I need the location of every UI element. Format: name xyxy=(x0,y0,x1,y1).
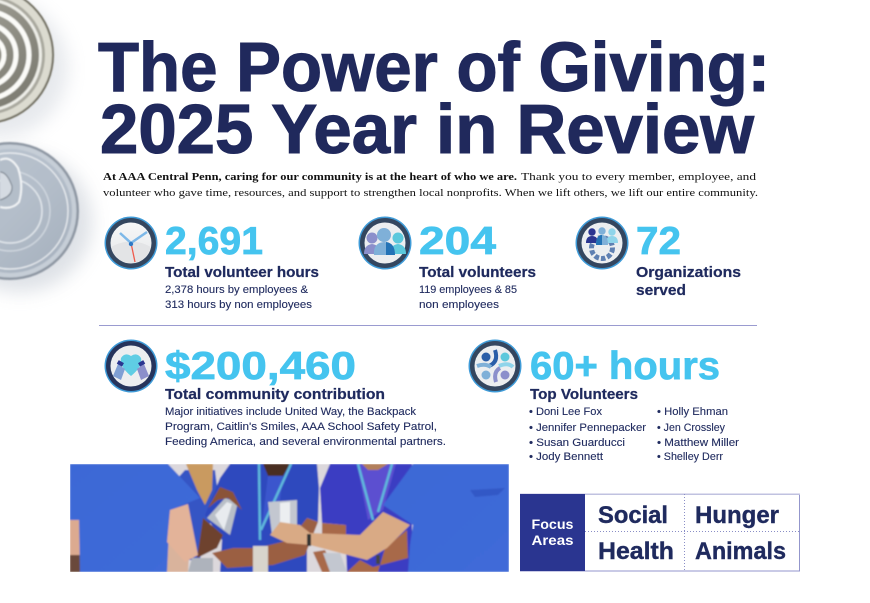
icon: volunteers group xyxy=(358,216,412,270)
stat: total community contribution: Major initiatives include United Way, the Backpack xyxy=(165,406,417,418)
stat: organizations served xyxy=(636,220,741,299)
stat: total community contribution: Total community contribution xyxy=(165,386,385,403)
person behind: shirt and hair xyxy=(167,470,220,560)
intro text: Thank you to every member, employee, and xyxy=(521,171,757,183)
held can right xyxy=(268,500,297,535)
right-centre person shirt xyxy=(320,464,412,572)
skin at far left edge xyxy=(70,519,80,556)
focus areas table: Hunger xyxy=(695,502,779,529)
stat: total community contribution: $200,460 xyxy=(165,345,356,388)
bottom can xyxy=(188,558,213,572)
stat: total volunteers: 119 employees & 85 xyxy=(419,284,517,296)
stat: total volunteer hours: 2,378 hours by employees & xyxy=(165,284,309,296)
title xyxy=(98,28,770,168)
focus areas table: Social xyxy=(598,502,668,529)
focus areas table: Health xyxy=(598,538,674,565)
photo: volunteers in blue shirts holding cans xyxy=(70,464,509,572)
stat: total volunteers: 204 xyxy=(419,220,496,263)
intro text xyxy=(103,171,758,199)
lower right hand and can xyxy=(312,549,330,572)
stat: total volunteer hours: Total volunteer hours xyxy=(165,264,319,281)
stat: total community contribution: Program, Caitlin's Smiles, AAA School Safety Patrol, xyxy=(165,421,437,433)
stat: 60+ hours top volunteers: Top Volunteers xyxy=(530,386,638,403)
list: volunteer names column one: • Doni Lee Fox xyxy=(529,406,602,418)
stat: 60+ hours top volunteers xyxy=(529,345,739,463)
list: volunteer names column two: • Jen Crossley xyxy=(657,422,725,434)
photo: two tin can lids xyxy=(0,0,92,292)
stat: 60+ hours top volunteers: 60+ hours xyxy=(530,345,720,388)
stat: total community contribution xyxy=(165,345,446,448)
list: volunteer names column two: • Matthew Miller xyxy=(657,437,739,449)
list: volunteer names column two: • Holly Ehman xyxy=(657,406,728,418)
front right person shirt xyxy=(383,464,509,572)
stat: total volunteer hours xyxy=(165,220,319,311)
stat: organizations served: served xyxy=(636,282,686,299)
stat: total volunteers xyxy=(419,220,536,311)
stat: organizations served: Organizations xyxy=(636,264,741,281)
list: volunteer names column one xyxy=(529,406,646,463)
stat: organizations served: 72 xyxy=(636,220,681,263)
icon: organizations xyxy=(576,216,628,270)
lanyard right-centre xyxy=(358,464,392,520)
list: volunteer names column one: • Jennifer Pennepacker xyxy=(529,422,646,434)
stat: total volunteer hours: 313 hours by non employees xyxy=(165,299,313,311)
reaching arm xyxy=(270,512,410,560)
front left person shirt xyxy=(70,464,200,572)
centre person right forearm xyxy=(212,518,318,568)
stat: total volunteers: Total volunteers xyxy=(419,264,536,281)
title: 2025 Year in Review xyxy=(100,90,755,168)
icon: top volunteers circle xyxy=(468,340,522,392)
centre person left forearm xyxy=(197,518,223,558)
divider xyxy=(99,325,757,326)
list: volunteer names column one: • Jody Bennett xyxy=(529,451,603,463)
intro text: At AAA Central Penn, caring for our community is at the heart of who we are. xyxy=(103,171,517,183)
list: volunteer names column two: • Shelley Derr xyxy=(657,451,723,463)
list: volunteer names column two xyxy=(657,406,739,463)
held can left xyxy=(207,498,238,535)
lanyard centre xyxy=(259,464,291,540)
stat: total community contribution: Feeding America, and several environmental partners. xyxy=(165,436,446,448)
focus areas table: Animals xyxy=(695,538,786,565)
centre person shirt xyxy=(205,464,319,572)
title: The Power of Giving: xyxy=(98,28,770,106)
focus areas label: Areas xyxy=(532,533,574,548)
focus areas label: Focus xyxy=(532,517,574,532)
intro text: volunteer who gave time, resources, and support to strengthen local nonprofits. When we lift others, we lift our entire community. xyxy=(103,187,758,199)
icon: hands holding heart xyxy=(104,340,158,392)
stat: total volunteer hours: 2,691 xyxy=(165,220,263,263)
focus areas table xyxy=(520,494,800,571)
stat: total volunteers: non employees xyxy=(419,299,500,311)
list: volunteer names column one: • Susan Guarducci xyxy=(529,437,625,449)
icon: clock xyxy=(104,216,158,270)
focus areas label xyxy=(520,494,585,571)
